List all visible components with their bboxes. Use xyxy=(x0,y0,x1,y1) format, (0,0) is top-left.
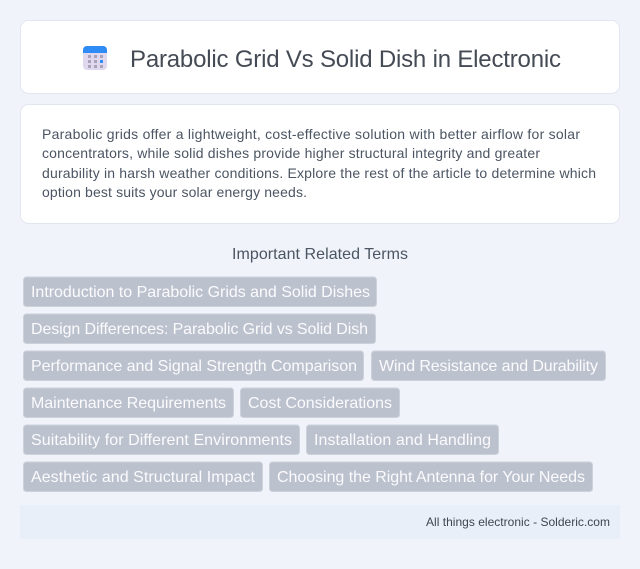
text: description paragraph: Parabolic grids offer a lightweight, cost-effective solution with better airflow for solar xyxy=(42,126,580,142)
tag: installation: Installation and Handling xyxy=(314,432,491,449)
tag: maintenance xyxy=(24,388,234,418)
tag: suitability: Suitability for Different Environments xyxy=(31,432,292,449)
text: description paragraph: durability in harsh weather conditions. Explore the rest of the article to determine which xyxy=(42,165,596,181)
tag: design differences xyxy=(24,314,376,344)
tag: maintenance: Maintenance Requirements xyxy=(31,395,226,412)
tag: aesthetic xyxy=(24,462,262,492)
tag: choosing antenna xyxy=(270,462,592,492)
tag: wind resistance: Wind Resistance and Durability xyxy=(379,358,598,375)
tag: design differences: Design Differences: Parabolic Grid vs Solid Dish xyxy=(31,321,368,338)
panel: description xyxy=(20,104,620,224)
icon: calendar xyxy=(83,46,107,70)
tag: introduction: Introduction to Parabolic Grids and Solid Dishes xyxy=(31,284,370,301)
text: description paragraph: concentrators, while solid dishes provide higher structural integrity and greater xyxy=(42,145,540,161)
text: description paragraph: option best suits your solar energy needs. xyxy=(42,184,307,200)
tag: wind resistance xyxy=(372,351,606,380)
text: description paragraph xyxy=(42,126,596,200)
tag: choosing antenna: Choosing the Right Antenna for Your Needs xyxy=(277,469,585,486)
panel: header xyxy=(20,20,620,94)
tag: cost xyxy=(240,388,400,418)
heading: important related terms: Important Related Terms xyxy=(232,246,408,263)
tag: suitability xyxy=(24,425,300,454)
footer xyxy=(20,505,620,539)
tag: introduction xyxy=(24,277,376,306)
tag list xyxy=(24,277,606,492)
tag: performance xyxy=(24,351,364,380)
footer: All things electronic - Solderic.com xyxy=(426,515,610,529)
title: Parabolic Grid Vs Solid Dish in Electronic xyxy=(130,46,561,73)
tag: cost: Cost Considerations xyxy=(248,395,392,412)
tag: installation xyxy=(306,425,498,454)
tag: performance: Performance and Signal Strength Comparison xyxy=(31,358,357,375)
tag: aesthetic: Aesthetic and Structural Impact xyxy=(31,469,256,486)
